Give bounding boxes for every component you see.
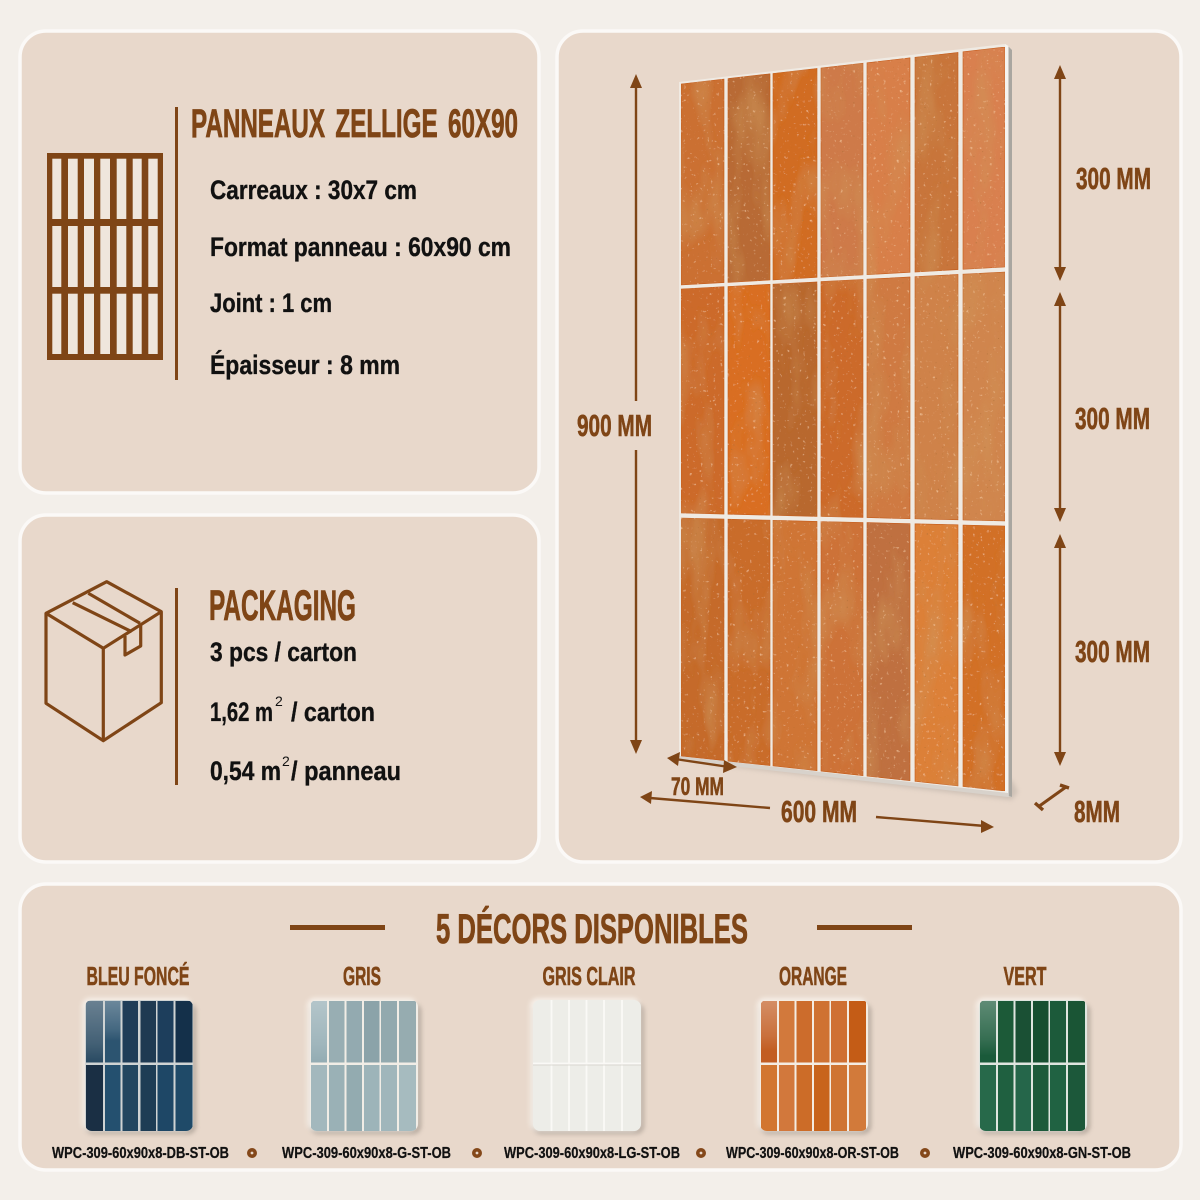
shadow under panel xyxy=(690,762,1018,800)
bullet xyxy=(474,1150,480,1156)
image: zellige tile panel xyxy=(679,44,1018,800)
icon: tile panel grid xyxy=(47,153,163,360)
bullet xyxy=(249,1150,255,1156)
dimension: 300 mm bottom xyxy=(1054,534,1150,766)
text: joint: Joint : 1 cm xyxy=(210,288,332,318)
dimension: 900 mm height: 900 MM xyxy=(577,408,652,443)
text: area per panel: 0,54 m xyxy=(210,756,281,786)
dimension: 300 mm top: 300 MM xyxy=(1076,161,1151,196)
dimension: 300 mm top xyxy=(1054,65,1151,281)
icon: cardboard box xyxy=(46,582,161,741)
decor: orange xyxy=(726,961,899,1162)
dimension: 900 mm height xyxy=(577,74,652,754)
dimension: 70 mm tile width: 70 MM xyxy=(671,773,724,801)
text: area per panel: 2 xyxy=(282,753,290,769)
decor: orange: ORANGE xyxy=(779,961,847,991)
dimension: 70 mm tile width xyxy=(667,752,737,801)
heading: panneaux zellige: PANNEAUX ZELLIGE 60X90 xyxy=(191,102,518,146)
decor: orange: WPC-309-60x90x8-OR-ST-OB xyxy=(726,1145,899,1162)
decor: vert: VERT xyxy=(1004,961,1047,991)
dimension: 300 mm bottom: 300 MM xyxy=(1075,634,1150,669)
dimension: 8 mm thickness: 8MM xyxy=(1074,794,1120,829)
decor: gris clair: GRIS CLAIR xyxy=(542,961,636,991)
dimension: 300 mm middle: 300 MM xyxy=(1075,401,1150,436)
panel: available decors xyxy=(20,884,1181,1170)
decor: bleu fonce xyxy=(52,961,229,1162)
dimension: 600 mm panel width xyxy=(640,791,994,833)
divider: specifications xyxy=(175,107,178,380)
decor: vert: WPC-309-60x90x8-GN-ST-OB xyxy=(953,1145,1131,1162)
text: panel format: Format panneau : 60x90 cm xyxy=(210,232,511,262)
panel: panel dimensions xyxy=(557,31,1181,862)
text: area per panel xyxy=(210,753,401,786)
heading: packaging: PACKAGING xyxy=(209,582,356,630)
panel: packaging xyxy=(20,515,539,862)
text: tile size: Carreaux : 30x7 cm xyxy=(210,175,417,205)
text: area per carton: / carton xyxy=(291,697,375,727)
heading: 5 decors: 5 DÉCORS DISPONIBLES xyxy=(436,905,748,952)
text: thickness: Épaisseur : 8 mm xyxy=(210,349,400,380)
bullet xyxy=(922,1150,928,1156)
decor: vert xyxy=(953,961,1131,1162)
decor: gris clair: WPC-309-60x90x8-LG-ST-OB xyxy=(504,1145,680,1162)
dimension: 300 mm middle xyxy=(1054,292,1150,522)
decor: gris xyxy=(282,961,451,1162)
text: area per carton xyxy=(210,693,375,727)
decor: bleu fonce: WPC-309-60x90x8-DB-ST-OB xyxy=(52,1145,229,1162)
decor: gris clair xyxy=(504,961,680,1162)
text: area per panel: / panneau xyxy=(291,756,401,786)
bullet xyxy=(698,1150,704,1156)
decor: gris: GRIS xyxy=(343,961,381,991)
divider: packaging xyxy=(175,588,178,785)
text: area per carton: 2 xyxy=(275,693,283,709)
dimension: 600 mm panel width: 600 MM xyxy=(781,794,857,829)
tiles xyxy=(681,47,1005,791)
panel backing and edge xyxy=(679,44,1012,797)
decor: bleu fonce: BLEU FONCÉ xyxy=(86,961,190,991)
panel: product specifications xyxy=(20,31,539,493)
dimension: 8 mm thickness xyxy=(1035,785,1120,829)
text: pieces per carton: 3 pcs / carton xyxy=(210,637,357,667)
decor: gris: WPC-309-60x90x8-G-ST-OB xyxy=(282,1145,451,1162)
text: area per carton: 1,62 m xyxy=(210,697,273,727)
